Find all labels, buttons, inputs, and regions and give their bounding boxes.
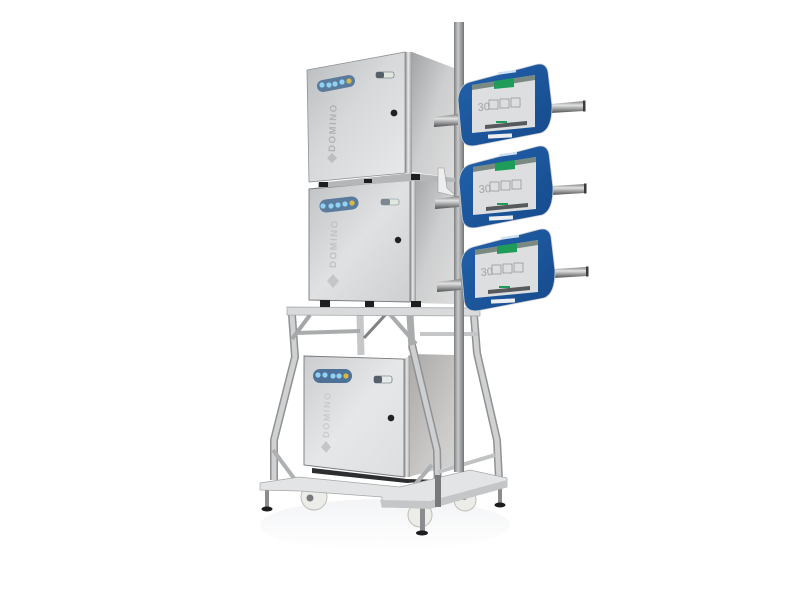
logo: [499, 152, 517, 157]
screen footer: [485, 121, 527, 129]
screen header: [473, 157, 536, 172]
top cabinet: [307, 52, 455, 188]
logo: [498, 70, 516, 75]
brand plate: [488, 133, 512, 139]
arm stubs: [437, 279, 461, 292]
cabinet front: [304, 356, 404, 477]
screen footer: [486, 203, 528, 211]
tablet 3: [437, 229, 588, 311]
cabinet side: [408, 354, 463, 477]
model badge: [381, 199, 399, 205]
status panel: [319, 78, 352, 88]
arm stubs: [434, 114, 458, 127]
levelling feet: [262, 483, 506, 536]
lock: [395, 237, 401, 243]
status panel: [313, 369, 352, 383]
arm stubs: [435, 196, 459, 209]
screen header: [472, 75, 535, 90]
brand text: DOMINO: [328, 219, 341, 268]
status panel: [320, 200, 355, 209]
bezel: [461, 229, 555, 311]
cabinet feet: [320, 300, 421, 307]
vertical pole: [454, 22, 464, 472]
cabinet gap and feet: [318, 173, 455, 188]
casters: [301, 484, 476, 527]
brand text: DOMINO: [321, 391, 333, 438]
middle cabinet: [309, 180, 454, 307]
bottom cabinet: [304, 354, 463, 483]
lock: [391, 110, 397, 116]
bezel: [458, 64, 552, 146]
base platform: [260, 470, 507, 509]
model badge: [374, 376, 392, 383]
brand plate: [491, 298, 515, 304]
model badge: [376, 72, 394, 78]
brand text: DOMINO: [327, 103, 340, 152]
cabinet front: [309, 180, 410, 302]
bezel: [459, 146, 553, 228]
rear legs and top bar: [274, 312, 499, 480]
wheeled frame: [274, 307, 499, 480]
screen readout: 30: [477, 101, 490, 114]
tablet 1: [434, 64, 586, 146]
mounting bracket: [438, 168, 454, 196]
floor reflection: [260, 499, 510, 551]
brand plate: [489, 215, 513, 221]
screen: [472, 75, 535, 133]
cabinet side: [412, 180, 454, 304]
screen header: [475, 240, 538, 255]
screen: [473, 157, 536, 215]
frame front parts: [273, 345, 495, 493]
logo: [501, 235, 519, 240]
screen footer: [488, 286, 530, 294]
screen readout: 30: [480, 266, 493, 279]
screen: [475, 240, 538, 298]
cabinet side: [412, 52, 454, 178]
screen readout: 30: [478, 183, 491, 196]
tablet 2: [435, 146, 586, 228]
lock: [388, 415, 394, 421]
cabinet front: [307, 52, 405, 182]
